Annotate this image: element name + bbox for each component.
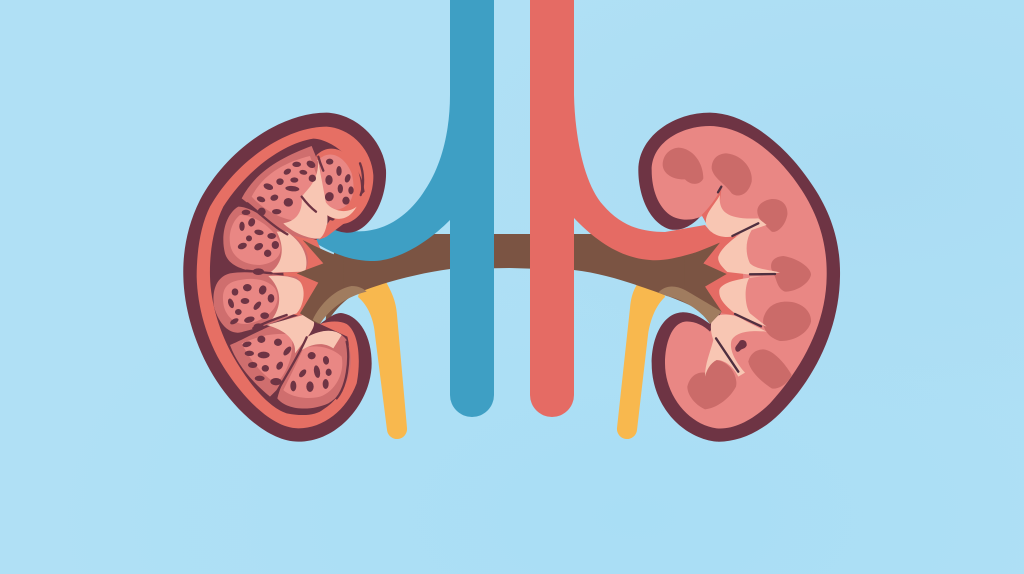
right brown calyx points xyxy=(685,243,727,324)
right artery: red curve and vertical xyxy=(530,0,722,417)
left brown calyx points xyxy=(297,240,343,324)
right kidney salmon calyx patch xyxy=(702,187,743,315)
left kidney upper-middle lobe xyxy=(223,207,308,273)
left kidney salmon calyx patch xyxy=(283,233,327,317)
left kidney lower-middle lobe xyxy=(213,272,304,333)
right kidney dark lines xyxy=(716,187,775,372)
right kidney xyxy=(638,113,840,442)
left kidney tan ureter root xyxy=(313,286,367,324)
renal pelvis: brown central band xyxy=(325,234,712,325)
right tan ureter root xyxy=(658,287,722,324)
right kidney capsule xyxy=(638,113,840,442)
left kidney dark cavity xyxy=(210,139,365,415)
left kidney dark divider lines xyxy=(247,157,363,398)
right kidney cream calyces xyxy=(705,195,780,377)
right kidney small dark spot xyxy=(735,340,747,352)
left kidney capsule xyxy=(183,113,386,442)
ureter: right yellow tube xyxy=(617,280,665,439)
left vein: blue curve and vertical xyxy=(305,0,494,417)
left kidney salmon cortex ring xyxy=(197,127,373,428)
right kidney medulla blotches xyxy=(663,148,811,409)
left kidney xyxy=(183,113,386,442)
left kidney dark spots xyxy=(227,159,354,392)
left kidney bottom lobes xyxy=(230,313,351,409)
left kidney top lobes xyxy=(242,146,361,241)
right kidney pink body xyxy=(652,126,827,429)
ureter: left yellow tube xyxy=(358,280,407,439)
